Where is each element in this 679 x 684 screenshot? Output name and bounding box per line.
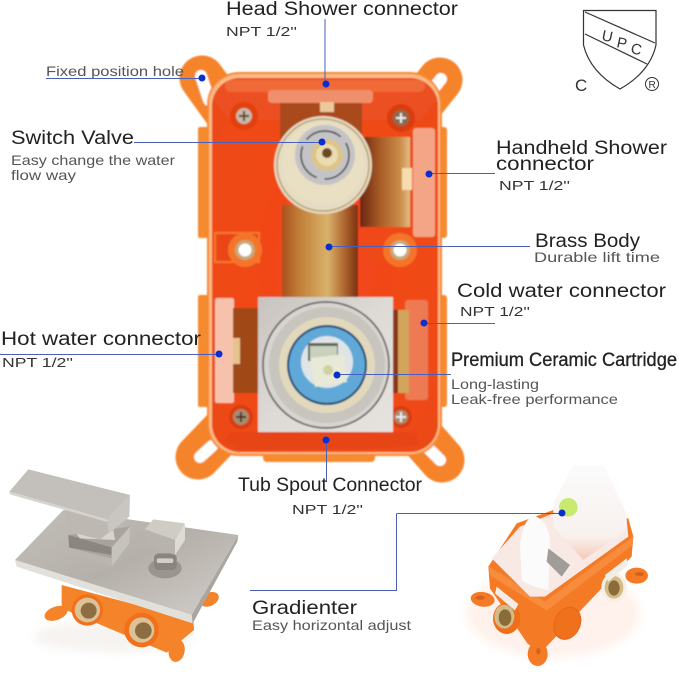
callout: hot water connector (0, 329, 222, 370)
product: trim plate with handles and box (9, 469, 238, 663)
product: mixing valve box, front view (198, 72, 447, 462)
UPC certification mark (575, 10, 658, 95)
shield (584, 10, 656, 89)
box body (207, 72, 442, 456)
callout: handheld shower connector: NPT 1/2'' (499, 178, 570, 193)
mounting ears (198, 76, 442, 460)
callout: switch valve: Easy change the water (11, 152, 175, 168)
callout: premium ceramic cartridge: Long-lasting (451, 376, 539, 392)
valve stem cover (520, 516, 550, 590)
switch valve cartridge (274, 116, 372, 214)
brass body (233, 102, 412, 393)
ceramic cartridge on square plate (258, 297, 393, 432)
cover cap (553, 465, 627, 560)
callout: brass body: Brass Body (535, 231, 641, 252)
callout: gradienter: Easy horizontal adjust (252, 617, 411, 633)
callout: head shower connector (226, 0, 459, 88)
callout: head shower connector: NPT 1/2'' (226, 24, 297, 39)
callout: fixed position hole (46, 63, 206, 82)
callout: cold water connector: Cold water connector (457, 281, 667, 302)
callout: fixed position hole: Fixed position hole (46, 63, 184, 79)
UPC certification mark: U (600, 27, 614, 46)
UPC certification mark: R (648, 80, 656, 91)
product: valve box with protective cover (467, 465, 648, 666)
callout: hot water connector: Hot water connector (1, 329, 202, 350)
side tabs (198, 127, 447, 462)
white interior (492, 513, 628, 597)
box (470, 510, 648, 666)
callout: tub spout connector: NPT 1/2'' (292, 502, 363, 517)
cover plate (15, 510, 238, 623)
callout: tub spout connector: Tub Spout Connector (238, 475, 423, 496)
small knob (145, 519, 185, 578)
callout: gradienter (250, 510, 566, 633)
large handle (9, 469, 130, 567)
callout: switch valve: Switch Valve (11, 128, 134, 149)
screws (229, 102, 415, 429)
orange box (42, 585, 221, 663)
callout: cold water connector: NPT 1/2'' (460, 304, 530, 319)
lower wall shading (225, 432, 420, 450)
UPC certification mark: P (615, 34, 628, 53)
frosted membranes (215, 90, 435, 403)
callout: premium ceramic cartridge (334, 350, 677, 407)
callout: gradienter: Gradienter (252, 598, 358, 619)
callout: switch valve (11, 128, 326, 183)
callout: handheld shower connector: connector (496, 154, 595, 175)
callout: handheld shower connector (426, 138, 668, 193)
shadow (33, 622, 193, 652)
UPC certification mark: C (575, 76, 587, 95)
callout: brass body: Durable lift time (534, 249, 660, 265)
UPC certification mark: C (629, 40, 643, 59)
callout: brass body (326, 231, 660, 265)
level bubble (559, 498, 578, 517)
callout: switch valve: flow way (11, 167, 76, 183)
callout: premium ceramic cartridge: Leak-free performance (451, 391, 618, 407)
orange ledges (363, 230, 411, 263)
callout: hot water connector: NPT 1/2'' (2, 355, 73, 370)
shadow (467, 570, 640, 657)
callout: tub spout connector (238, 436, 423, 517)
callout: cold water connector (420, 281, 667, 326)
mounting holes (228, 233, 417, 267)
callout: handheld shower connector: Handheld Shower (496, 138, 668, 159)
instruction label (547, 548, 570, 577)
